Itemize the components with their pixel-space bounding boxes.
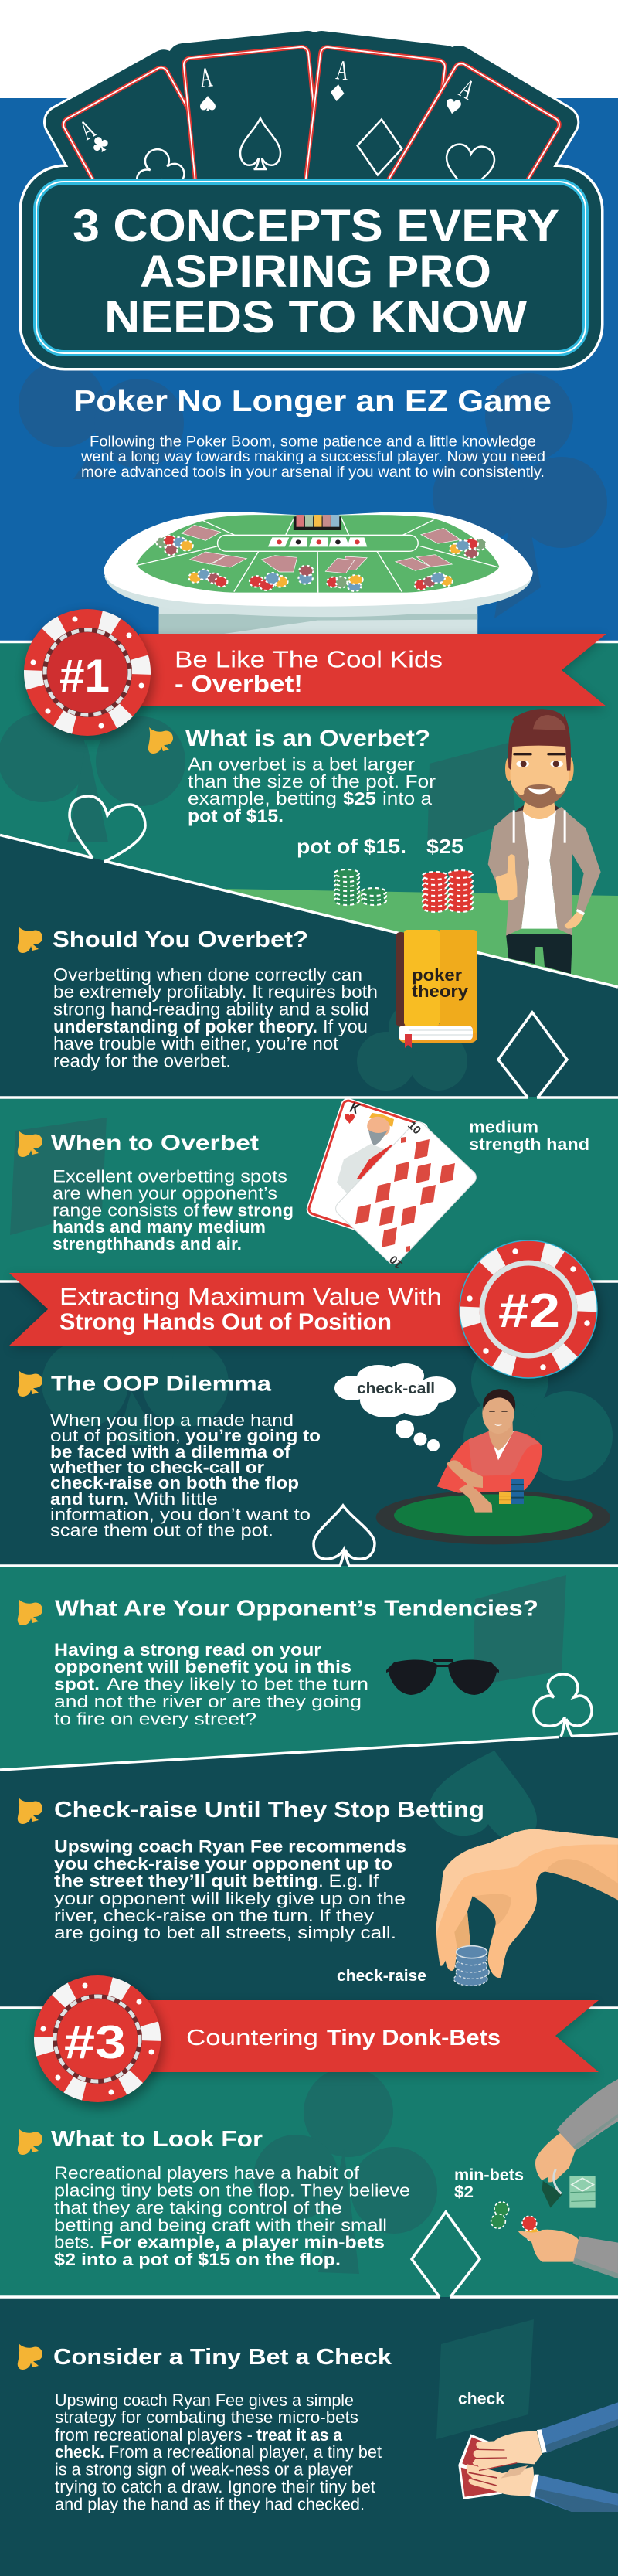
icon: sunglasses xyxy=(386,1659,499,1695)
text block: What to Look For: bets. xyxy=(54,2233,94,2252)
illustration: man giving thumbs-up xyxy=(488,709,601,974)
label: medium strength hand xyxy=(469,1118,589,1154)
label: min-bets $2: min-bets xyxy=(454,2166,524,2184)
ribbon: section 2: Strong Hands Out of Position xyxy=(59,1308,392,1336)
text block: Check-raise: the street they’ll quit betting xyxy=(54,1871,318,1890)
text block: The OOP Dilemma: and turn. xyxy=(50,1489,129,1509)
text block: Should You Overbet: strong hand-reading ability and a solid xyxy=(53,999,369,1019)
illustration: king and ten of diamonds: 10 xyxy=(405,1118,423,1137)
text block: Check-raise: you check-raise your opponent up to xyxy=(54,1854,392,1873)
text block: Tendencies: and not the river or are they going xyxy=(54,1692,362,1711)
card: ace of diamonds xyxy=(300,46,446,245)
text block: Tendencies xyxy=(54,1640,368,1728)
intro text: Following the Poker Boom, some patience and a little knowledge xyxy=(90,434,536,450)
text block: Tendencies: to fire on every street? xyxy=(54,1710,256,1728)
ribbon: section 2 xyxy=(9,1273,494,1349)
text block: Check-raise: river, check-raise on the turn. If they xyxy=(54,1906,374,1925)
text block: What is an Overbet: example, betting xyxy=(188,788,337,808)
text block: What is an Overbet: An overbet is a bet larger xyxy=(188,754,415,774)
heading: Consider a Tiny Bet a Check: Consider a Tiny Bet a Check xyxy=(53,2345,392,2370)
illustration: hand with chip stack xyxy=(436,1829,618,1986)
title: ASPIRING PRO xyxy=(140,247,491,297)
text block: Consider a Tiny Bet a Check: treat it as a xyxy=(256,2425,343,2445)
text block: Should You Overbet: have trouble with either, you’re not xyxy=(53,1033,339,1053)
text block: Should You Overbet: ready for the overbet. xyxy=(53,1051,231,1071)
illustration: hands betting chips xyxy=(491,2079,618,2278)
chip: #2: #2 xyxy=(498,1285,560,1338)
icon: poker theory book xyxy=(396,930,477,1048)
card: ace of spades: A xyxy=(199,62,214,94)
text block: Check-raise xyxy=(54,1836,406,1942)
text block: What to Look For: placing tiny bets on the flop. They believe xyxy=(54,2181,410,2200)
heading: Should You Overbet?: Should You Overbet? xyxy=(53,927,308,952)
chip: #2 xyxy=(457,1238,600,1383)
diamond outline xyxy=(412,2212,480,2297)
text block: Consider a Tiny Bet a Check: check. xyxy=(55,2442,104,2462)
icon: poker theory book: theory xyxy=(412,982,469,1001)
heading: What to Look For xyxy=(18,2127,263,2155)
text block: When to Overbet xyxy=(53,1167,294,1254)
card: ace of hearts xyxy=(364,61,562,281)
diamond outline xyxy=(498,1012,567,1097)
illustration: king and ten of diamonds xyxy=(304,1097,479,1271)
text block: What is an Overbet: $25 xyxy=(343,788,376,808)
text block: When to Overbet: hands and many medium xyxy=(53,1217,266,1237)
text block: Consider a Tiny Bet a Check: is a strong sign of weak-ness or a player xyxy=(55,2459,353,2479)
heading: The OOP Dilemma: The OOP Dilemma xyxy=(51,1372,271,1396)
text block: Consider a Tiny Bet a Check xyxy=(55,2391,382,2514)
ribbon: section 1: Be Like The Cool Kids xyxy=(175,646,443,673)
heading: What Are Your Opponent's Tendencies?: What Are Your Opponent’s Tendencies? xyxy=(55,1597,538,1621)
text block: Consider a Tiny Bet a Check: strategy for combating these micro-bets xyxy=(55,2408,358,2427)
text block: The OOP Dilemma: With little xyxy=(134,1489,218,1509)
text block: What is an Overbet: pot of $15. xyxy=(188,806,284,826)
text block: Should You Overbet: If you xyxy=(323,1016,368,1036)
text block: The OOP Dilemma: check-raise on both the flop xyxy=(50,1473,299,1492)
illustration: player at table xyxy=(376,1389,610,1544)
text block: Should You Overbet: Overbetting when done correctly can xyxy=(53,965,362,985)
chip labels xyxy=(297,835,464,858)
heading: What to Look For: What to Look For xyxy=(51,2127,263,2152)
panel: divider lines xyxy=(0,641,618,2297)
heart outline xyxy=(70,796,145,862)
text block: What to Look For: betting and being craft with their small xyxy=(54,2216,387,2235)
text block: Tendencies: Are they likely to bet the turn xyxy=(107,1674,368,1694)
text block: When to Overbet: strengthhands and air. xyxy=(53,1234,242,1254)
text block: Consider a Tiny Bet a Check: Upswing coach Ryan Fee gives a simple xyxy=(55,2391,354,2410)
chip: #3: #3 xyxy=(64,2016,126,2068)
text block: The OOP Dilemma: scare them out of the pot. xyxy=(50,1520,273,1540)
text block: Tendencies: Having a strong read on your xyxy=(54,1640,321,1659)
label: min-bets $2: $2 xyxy=(454,2183,474,2201)
card: ace of clubs xyxy=(61,65,253,284)
text block: What is an Overbet xyxy=(188,754,436,826)
text block: The OOP Dilemma: When you flop a made hand xyxy=(50,1411,294,1430)
text block: When to Overbet: few strong xyxy=(202,1200,294,1220)
club outline xyxy=(534,1674,592,1737)
ribbon: section 3: Tiny Donk-Bets xyxy=(327,2026,501,2050)
text block: What to Look For: Recreational players have a habit of xyxy=(54,2163,360,2183)
thought bubble: check-call xyxy=(334,1363,456,1451)
label: check: check xyxy=(458,2391,504,2408)
heading: When to Overbet xyxy=(18,1131,259,1157)
text block: What to Look For xyxy=(54,2163,410,2269)
thought bubble: check-call: check-call xyxy=(357,1380,435,1397)
intro text xyxy=(80,434,545,481)
label: min-bets $2 xyxy=(454,2166,524,2201)
illustration: king and ten of diamonds: K xyxy=(348,1098,362,1118)
intro text: went a long way towards making a successful player. Now you need xyxy=(80,449,545,465)
text block: Tendencies: opponent will benefit you in this xyxy=(54,1657,351,1676)
ribbon: section 2: Extracting Maximum Value With xyxy=(59,1283,442,1310)
text block: What to Look For: that they are taking control of the xyxy=(54,2198,342,2217)
text block: When to Overbet: range consists of xyxy=(53,1200,200,1220)
header: card fan and title plaque xyxy=(20,46,603,369)
text block: What is an Overbet: than the size of the pot. For xyxy=(188,771,436,791)
text block: The OOP Dilemma: you’re going to xyxy=(185,1426,321,1445)
title xyxy=(73,201,559,342)
text block: Should You Overbet: be extremely profitably. It requires both xyxy=(53,982,378,1002)
text block: Check-raise: . E.g. If xyxy=(318,1871,379,1890)
heading: What is an Overbet?: What is an Overbet? xyxy=(185,726,430,751)
text block: The OOP Dilemma: whether to check-call or xyxy=(49,1458,264,1477)
text block: Consider a Tiny Bet a Check: and play the hand as if they had checked. xyxy=(55,2495,365,2514)
label: medium strength hand: strength hand xyxy=(469,1135,589,1154)
text block: Tendencies: spot. xyxy=(54,1674,100,1694)
chip: #1 xyxy=(22,607,154,742)
text block: The OOP Dilemma: out of position, xyxy=(50,1426,181,1445)
chip labels: pot of $15. xyxy=(297,835,406,858)
text block: When to Overbet: are when your opponent’s xyxy=(53,1184,277,1203)
text block: What to Look For: For example, a player min-bets xyxy=(100,2233,385,2252)
illustration: poker table xyxy=(104,512,533,635)
text block: The OOP Dilemma: information, you don’t want to xyxy=(50,1505,311,1524)
card: ace of clubs: A xyxy=(74,114,100,146)
chip labels: $25 xyxy=(426,835,464,858)
text block: When to Overbet: Excellent overbetting spots xyxy=(53,1167,287,1186)
icon: poker theory book: poker xyxy=(412,965,462,985)
chip: #1: #1 xyxy=(59,650,110,702)
text block: Consider a Tiny Bet a Check: from recreational players - xyxy=(55,2425,253,2445)
chip stacks: pot and bet xyxy=(334,869,473,912)
text block: Consider a Tiny Bet a Check: trying to catch a draw. Ignore their tiny bet xyxy=(55,2477,375,2496)
card: ace of diamonds: A xyxy=(334,55,351,87)
text block: The OOP Dilemma: be faced with a dilemma of xyxy=(50,1442,291,1462)
intro text: more advanced tools in your arsenal if you want to win consistently. xyxy=(81,464,545,481)
text block: Check-raise: are going to bet all streets, simply call. xyxy=(54,1923,396,1942)
label: medium strength hand: medium xyxy=(469,1118,538,1136)
title: 3 CONCEPTS EVERY xyxy=(73,201,559,251)
text block: Should You Overbet xyxy=(53,965,378,1071)
illustration: king and ten of diamonds: 10 xyxy=(387,1253,406,1271)
text block: Check-raise: your opponent will likely give up on the xyxy=(54,1889,406,1908)
text block: Check-raise: Upswing coach Ryan Fee recommends xyxy=(54,1836,406,1856)
text block: Should You Overbet: understanding of poker theory. xyxy=(53,1016,317,1036)
ribbon: section 1 xyxy=(139,634,606,710)
text block: What to Look For: $2 into a pot of $15 on the flop. xyxy=(54,2250,341,2269)
spade outline xyxy=(314,1506,375,1566)
subtitle: Poker No Longer an EZ Game xyxy=(73,385,552,418)
label: check-raise: check-raise xyxy=(337,1968,426,1985)
heading: Check-raise Until They Stop Betting: Check-raise Until They Stop Betting xyxy=(54,1798,484,1822)
text block: What is an Overbet: into a xyxy=(382,788,432,808)
heading: The OOP Dilemma xyxy=(18,1370,271,1397)
title: NEEDS TO KNOW xyxy=(104,292,527,342)
heading: What Are Your Opponent's Tendencies? xyxy=(18,1597,538,1625)
chip: #3 xyxy=(32,1973,165,2108)
text block: Consider a Tiny Bet a Check: From a recreational player, a tiny bet xyxy=(109,2442,382,2462)
ribbon: section 3: Countering xyxy=(186,2026,318,2050)
text block: The OOP Dilemma xyxy=(49,1411,321,1540)
ribbon: section 1: - Overbet! xyxy=(175,670,303,697)
card: ace of hearts: A xyxy=(454,73,480,106)
heading: When to Overbet: When to Overbet xyxy=(51,1131,259,1155)
card: ace of spades xyxy=(183,46,326,243)
illustration: hands covering cards xyxy=(458,2402,618,2512)
ribbon: section 3 xyxy=(147,2000,599,2075)
